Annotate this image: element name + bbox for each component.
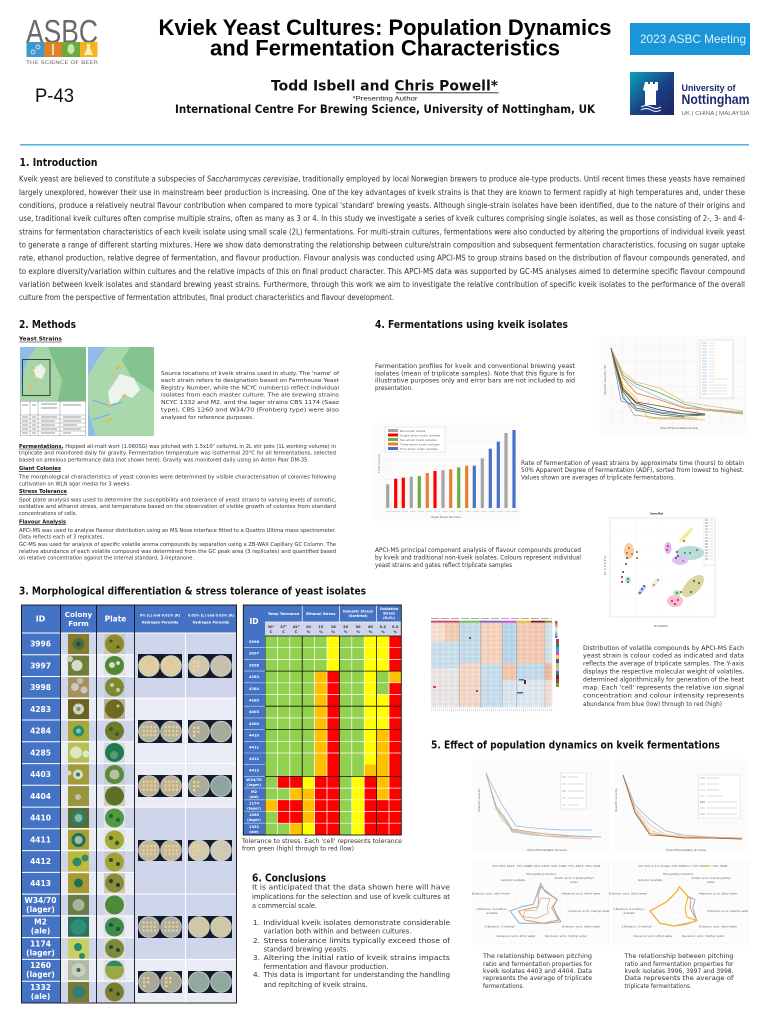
text block: left radar caption: ratio and fermentation properties for xyxy=(483,961,593,968)
text block: conclusions intro xyxy=(252,882,451,910)
column: strain IDs: (ale) xyxy=(31,927,50,936)
stress row labels: 3996 xyxy=(249,640,259,644)
column: strain IDs: 1260 xyxy=(30,961,51,970)
title: and Fermentation Characteristics xyxy=(210,36,560,60)
radar axis labels: 1-Butanol, 3-methyl- xyxy=(485,924,515,928)
plates: group W34/70 to 1174 xyxy=(138,916,232,938)
text block: right radar caption xyxy=(623,953,735,990)
radar axis labels: Decanoic acid, ethyl ester xyxy=(496,934,536,938)
column: strain IDs: 4411 xyxy=(30,835,51,844)
radar axis labels: Butanoic acid, ethyl ester xyxy=(472,892,511,896)
stress row labels: 4412 xyxy=(249,757,259,761)
table: colony morphology and hydrogen peroxide plates xyxy=(21,605,237,1003)
stress row labels: 3998 xyxy=(249,663,259,667)
radar axis labels: Acetic acid, 2-phenylethyl xyxy=(555,876,594,880)
scatter plot: PCA score plot: PC 1 (44.9%) xyxy=(654,624,668,628)
text block: right radar caption: kveik isolates 3996, 3997 and 3998. xyxy=(624,968,734,975)
list: conclusions: standard brewing yeasts. xyxy=(264,944,348,954)
plates: group 4403 and 4404 xyxy=(138,775,232,797)
table header xyxy=(36,610,235,628)
text block: right radar caption: ratio and fermentation properties for xyxy=(624,961,734,968)
radar axis labels: Octanoic acid, methyl ester xyxy=(568,909,610,913)
stress table headers: 42° xyxy=(293,625,300,629)
radar legend: 25% 4403, 75% 4404 xyxy=(499,864,532,868)
text block: bar chart caption xyxy=(521,460,744,482)
text block: map caption: Source locations of kveik strains used in study. The 'name' of xyxy=(161,371,339,377)
text block: flavour analysis: APCI-MS was used to analyse flavour distribution using an MS Nose interface fitted to a Quattro Ultima mass spectrometer. xyxy=(19,528,336,534)
text block: map caption: Registry Number, while the NCYC number(s) reflect individual xyxy=(161,385,339,391)
text block: heat map caption xyxy=(583,645,745,708)
authors xyxy=(175,78,596,116)
table header: Colony xyxy=(65,610,93,619)
authors: Todd Isbell and Chris Powell* xyxy=(271,78,498,94)
list: conclusions xyxy=(253,918,451,989)
logo: University of Nottingham: University of xyxy=(682,83,736,93)
stress table headers: Oxidative xyxy=(380,607,399,611)
radar axis labels: Hexanoic acid, ethyl ester xyxy=(698,892,738,896)
text block: heat map caption: reflects the average of triplicate samples. The Y-axis xyxy=(583,660,744,667)
logo: ASBC xyxy=(25,13,99,66)
line chart: 4403 and 4404 pitching ratio xyxy=(473,759,609,852)
text block: heat map caption: map. Each 'cell' represents the relative ion signal xyxy=(583,684,744,691)
stress row labels: 4410 xyxy=(249,734,259,738)
radar axis labels: ester xyxy=(570,880,579,884)
scatter plot: PCA score plot: Score Plot xyxy=(650,512,664,516)
stress row labels: 3997 xyxy=(249,652,259,656)
radar axis labels: Phenylethyl Alcohol xyxy=(526,872,556,876)
radar axis labels: Isobutyl acetate xyxy=(501,878,525,882)
stress table headers: C xyxy=(282,630,285,634)
line chart: 4403 and 4404 pitching ratio: Time of Fermentation (in hours) xyxy=(526,848,567,852)
stress table headers: C xyxy=(270,630,273,634)
column: strain IDs: 4285 xyxy=(30,748,51,757)
meeting badge xyxy=(630,23,750,55)
radar axis labels: Octanoic acid, ethyl ester xyxy=(699,924,738,928)
authors: International Centre For Brewing Science, University of Nottingham, UK xyxy=(175,102,596,116)
radar axis labels: 1-Butanol, 3-methyl-, xyxy=(613,907,645,911)
list: conclusions: 1. xyxy=(253,918,260,927)
caption: stress table: Tolerance to stress. Each 'cell' represents tolerance xyxy=(241,838,402,845)
text block: bar chart caption: 50% Apparent Degree of Fermentation (ADF), sorted from lowest to highest. xyxy=(521,467,744,474)
plates: group 4283 to 4285 xyxy=(138,720,232,743)
text block: heat map caption: yeast strain is colour coded as indicated and data xyxy=(583,652,744,659)
list: conclusions: Stress tolerance limits typically exceed those of xyxy=(264,936,451,945)
radar chart: 4403 and 4404 flavour xyxy=(472,862,610,944)
text block: conclusions intro: a commercial scale. xyxy=(252,901,317,910)
radar axis labels: ester xyxy=(707,880,716,884)
stress row labels: (ale) xyxy=(249,795,259,799)
stress table headers: 37° xyxy=(280,625,287,629)
radar axis labels: Acetic acid, 2-phenylethyl xyxy=(692,876,731,880)
text block: fermentation profiles caption: isolates (mean of triplicate samples). Note that this figure is for xyxy=(375,370,576,377)
text block: map caption xyxy=(161,371,339,421)
radar legend: 50% 4403, 50% 4404 xyxy=(534,864,567,868)
table header: 0% (L) and 0.01% (R) xyxy=(140,614,181,618)
map: kveik source locations xyxy=(20,347,154,436)
column: strain IDs: 4284 xyxy=(30,727,51,736)
text block: right radar caption: triplicate fermentations. xyxy=(624,983,692,990)
text block: introduction body: culture from the perspective of fermentation attributes, final product characteristics and flavour development. xyxy=(19,293,394,302)
stress row labels: (lager) xyxy=(247,806,261,810)
bar chart legend: Two-strain kveik isolates xyxy=(399,438,437,442)
stress row labels: 4403 xyxy=(249,710,259,714)
text block: map caption: analysed for reference purposes. xyxy=(161,415,254,421)
logo: University of Nottingham: UK | CHINA | MALAYSIA xyxy=(682,111,750,117)
column: colony form photos xyxy=(66,634,90,1002)
radar axis labels: 1-Butanol, 3-methyl- xyxy=(622,924,652,928)
stress table headers: 30 xyxy=(355,625,361,629)
heat map: volatile compounds xyxy=(431,618,559,710)
stress table headers: C xyxy=(295,630,298,634)
column: strain IDs: (lager) xyxy=(26,948,55,958)
radar axis labels: Decanoic acid, methyl ester xyxy=(682,934,725,938)
text block: flavour analysis: Flavour Analysis xyxy=(19,519,67,525)
column: strain IDs: (lager) xyxy=(26,905,55,914)
plates: group 4410 to 4413 xyxy=(138,840,232,861)
text block: stress tolerance xyxy=(19,489,336,517)
column: strain IDs: 4403 xyxy=(30,770,51,779)
list: conclusions: and repitching of kveik strains. xyxy=(264,980,368,989)
text block: flavour analysis: on relative concentration against the internal standard, 3-heptanone. xyxy=(19,556,194,562)
logo: University of Nottingham xyxy=(630,72,750,117)
stress table headers: % xyxy=(393,630,397,634)
stress table headers: % xyxy=(381,630,385,634)
text block: fermentations xyxy=(19,443,336,464)
stress row labels: 4285 xyxy=(249,698,259,702)
table header: Form xyxy=(68,619,89,628)
text block: PCA caption: APCI-MS principal component analysis of flavour compounds produced xyxy=(375,547,581,554)
list: conclusions: variation both within and between cultures. xyxy=(264,926,412,936)
stress table headers: % xyxy=(319,630,323,634)
stress table headers: % xyxy=(307,630,311,634)
column: strain IDs: (lager) xyxy=(26,970,55,979)
column: strain IDs: W34/70 xyxy=(25,896,56,905)
column: strain IDs: 3996 xyxy=(30,640,51,649)
logo: ASBC: THE SCIENCE OF BEER xyxy=(25,60,99,66)
radar axis labels: Octanoic acid, ethyl ester xyxy=(562,924,601,928)
text block: stress tolerance: concentrations of cells. xyxy=(19,511,77,517)
radar legend: 70% 3996 xyxy=(671,864,686,868)
stress table headers: % xyxy=(331,630,335,634)
heading: effect of population dynamics: 5. Effect of population dynamics on kveik fermentations xyxy=(431,740,720,752)
poster number: P-43 xyxy=(35,85,74,107)
column: strain IDs: 4413 xyxy=(30,879,51,888)
column: strain IDs: 4404 xyxy=(30,792,51,801)
text block: flavour analysis: GC-MS was used for analysis of specific volatile aroma compounds by separation using a ZB-WAX Capillary GC Column. The xyxy=(19,542,337,548)
stress table headers: % xyxy=(356,630,360,634)
heading: fermentations using kveik isolates: 4. Fermentations using kveik isolates xyxy=(375,319,568,331)
text block: PCA caption: yeast strains and gates reflect triplicate samples xyxy=(375,562,512,569)
text block: fermentations: based on previous performance data (not shown here). Gravity was monitored daily using an Anton Paar DM-35. xyxy=(19,458,309,464)
text block: flavour analysis xyxy=(19,519,337,562)
stress row labels: 1332 xyxy=(249,825,259,829)
text block: flavour analysis: Data reflects each of 3 replicates. xyxy=(19,535,104,541)
text block: flavour analysis: relative abundance of each volatile compound was determined from the GC peak area (3 replicates) and quantified based xyxy=(19,549,336,555)
radar axis labels: Butanoic acid, ethyl ester xyxy=(609,892,648,896)
heading: conclusions: 6. Conclusions xyxy=(252,872,326,884)
text block: giant colonies: The morphological characteristics of yeast colonies were determined by visible characterisation of colonies following xyxy=(18,475,336,481)
radar axis labels: Phenylethyl Alcohol xyxy=(663,872,693,876)
list: conclusions: Altering the initial ratio of kveik strains impacts xyxy=(264,953,450,962)
bar chart legend: Four-strain kveik isolates xyxy=(400,447,438,451)
text block: fermentation profiles caption xyxy=(375,363,576,392)
text block: stress tolerance: Stress Tolerance xyxy=(19,489,67,495)
text block: map caption: type), CBS 1260 and W34/70 (Frohberg type) were also xyxy=(161,407,339,413)
stress row labels: 4413 xyxy=(249,769,259,773)
line chart: 4403 and 4404 pitching ratio: Specific Gravity xyxy=(477,788,481,812)
radar legend: 75% 4403, 25% 4404 xyxy=(568,864,601,868)
column: strain IDs: 4283 xyxy=(30,705,51,714)
list: conclusions: This data is important for understanding the handling xyxy=(263,970,450,979)
stress cells xyxy=(265,605,401,835)
radar legend: 70% 3998 xyxy=(712,864,727,868)
plates: group 3996 to 3998 xyxy=(138,654,232,678)
stress table headers: 40 xyxy=(368,625,373,629)
radar axis labels: Decanoic acid, ethyl ester xyxy=(633,934,673,938)
text block: map caption: NCYC 1332 and M2, and the lager strains CBS 1174 (Saaz xyxy=(161,400,339,406)
table: stress tolerance heat table xyxy=(243,605,401,835)
radar axis labels: acetate xyxy=(623,911,635,915)
text block: heat map caption: displays the respective molecular weight of volatiles, xyxy=(583,668,744,675)
heading: introduction: 1. Introduction xyxy=(20,157,98,169)
stress table headers: 10 xyxy=(306,625,311,629)
stress row labels xyxy=(243,636,265,835)
stress table headers: 20 xyxy=(343,625,349,629)
text block: left radar caption: The relationship between pitching xyxy=(482,953,592,960)
title xyxy=(158,15,612,60)
table header: ID xyxy=(36,614,46,624)
bar chart legend: Three-strain kveik isolates xyxy=(399,442,440,446)
text block: giant colonies: Giant Colonies xyxy=(19,466,62,472)
radar legend xyxy=(638,864,727,868)
scatter plot: PCA score plot: PC 2 (19.4%) xyxy=(603,555,607,575)
radar axis labels: acetate xyxy=(486,911,498,915)
radar chart: 3996 to 3998 flavour xyxy=(609,862,749,944)
stress table headers: Temp Tolerance xyxy=(268,612,300,616)
stress row labels: (lager) xyxy=(247,783,261,787)
list: conclusions: fermentation and flavour production. xyxy=(264,962,388,971)
table header: 0.02% (L) and 0.03% (R) xyxy=(188,614,235,618)
stress table headers: 18 xyxy=(331,625,336,629)
text block: fermentation profiles caption: Fermentation profiles for kveik and conventional brewing yeast xyxy=(375,363,576,370)
bar chart legend: Single-strain kveik isolates xyxy=(400,434,441,438)
stress row labels: (ale) xyxy=(249,830,259,834)
column: strain IDs: M2 xyxy=(34,918,47,927)
stress table headers: ID xyxy=(249,617,259,626)
column: strain IDs: 4410 xyxy=(30,814,51,823)
stress table headers: (Sorbitol) xyxy=(348,614,368,618)
bar chart: time to 50% ADF: Time (hours) xyxy=(377,454,381,474)
text block: PCA caption: by kveik and traditional non-kveik isolates. Colours represent individual xyxy=(375,554,581,561)
stress row labels: 4283 xyxy=(249,675,259,679)
text block: heat map caption: Distribution of volatile compounds by APCI-MS Each xyxy=(583,645,744,652)
heading: methods: 2. Methods xyxy=(19,319,76,331)
stress row labels: 1174 xyxy=(249,802,259,806)
text block: fermentation profiles caption: illustrative purposes only and error bars are not included to aid xyxy=(375,378,575,385)
bar chart: time to 50% ADF xyxy=(373,423,520,521)
radar axis labels xyxy=(609,872,749,938)
line chart: fermentation profiles: Specific Gravity (°P) xyxy=(603,365,607,395)
text block: giant colonies: cultivation on WLN agar media for 3 weeks. xyxy=(19,481,131,487)
text block: conclusions intro: It is anticipated that the data shown here will have xyxy=(252,882,451,892)
stress table headers: 0.2 xyxy=(380,625,386,629)
list: conclusions: 4. xyxy=(253,970,260,979)
column: strain IDs: 1332 xyxy=(30,983,51,992)
text block: left radar caption: fermentations. xyxy=(483,983,524,990)
stress table headers: % xyxy=(369,630,373,634)
line chart: 3996 to 3998 pitching ratio xyxy=(613,759,748,852)
text block: left radar caption: kveik isolates 4403 and 4404. Data xyxy=(483,968,592,975)
scatter plot: PCA score plot xyxy=(603,512,715,628)
text block: fermentations: triplicate and monitored daily for gravity. Fermentation temperature was isothermal 20°C for all fermentations, selected xyxy=(19,451,336,457)
table header: Plate xyxy=(105,614,126,624)
text block: PCA caption xyxy=(375,547,581,569)
caption: stress table xyxy=(241,838,402,852)
stress row labels: 4411 xyxy=(249,745,259,749)
line chart: fermentation profiles: Time of Fermentation (hours) xyxy=(659,426,698,430)
stress row labels: M2 xyxy=(251,790,258,794)
stress table headers: 30° xyxy=(268,625,275,629)
text block: heat map caption: concentration and colour intensity represents xyxy=(583,692,744,699)
stress row labels: W34/70 xyxy=(246,778,262,782)
column: plate photos xyxy=(104,634,125,1002)
text block: right radar caption: The relationship between pitching xyxy=(623,953,734,960)
stress table headers: Ethanol Stress xyxy=(306,612,336,616)
radar axis labels: Isobutyl acetate xyxy=(638,878,662,882)
stress row labels: 1260 xyxy=(249,813,259,817)
radar legend: 70% 3997 xyxy=(692,864,707,868)
stress table headers: 15 xyxy=(318,625,324,629)
column: strain IDs: 3997 xyxy=(30,661,51,670)
table header: Hydrogen Peroxide xyxy=(142,620,179,624)
line chart: 3996 to 3998 pitching ratio: Time of Fermentation (in hours) xyxy=(665,848,706,852)
radar axis labels: 1-Butanol, 3-methyl-, xyxy=(476,907,508,911)
meeting badge: 2023 ASBC Meeting xyxy=(640,32,746,46)
bar chart: time to 50% ADF: Yeast Strain Number xyxy=(431,515,462,519)
heading: morphological differentiation: 3. Morphological differentiation & stress tolerance of yeast isolates xyxy=(19,586,366,598)
text block: fermentation profiles caption: presentation. xyxy=(375,385,413,392)
text block: stress tolerance: Spot plate analysis was used to determine the susceptibility and tolerance of yeast strains to varying levels of osmotic, xyxy=(19,497,336,503)
stress table headers: Stress xyxy=(383,612,395,616)
text block: heat map caption: abundance from blue (low) through to red (high) xyxy=(583,701,722,708)
text block: fermentations: Fermentations. Hopped all-malt wort (1.060SG) was pitched with 1.5x10⁷ cells/mL in 2L stir pots (1L working volume) in xyxy=(19,443,336,450)
stress row labels: 4404 xyxy=(249,722,259,726)
text block: bar chart caption: Values shown are averages of triplicate fermentations. xyxy=(521,474,675,482)
panel: methods xyxy=(18,319,339,562)
text block: left radar caption: represents the average of triplicate xyxy=(483,975,592,982)
text block: giant colonies xyxy=(18,466,336,487)
plates: group 1260 and 1332 xyxy=(138,971,232,993)
radar axis labels: Hexanoic acid, ethyl ester xyxy=(561,892,601,896)
stress table headers: Osmotic Stress xyxy=(343,610,373,614)
radar axis labels: Decanoic acid, methyl ester xyxy=(545,934,588,938)
list: conclusions: Individual kveik isolates demonstrate considerable xyxy=(264,918,451,927)
bar chart legend: Non-kveik Yeasts xyxy=(400,429,426,433)
text block: introduction body xyxy=(19,175,745,302)
column: strain IDs: 4412 xyxy=(30,857,51,866)
column: strain IDs: 1174 xyxy=(30,940,51,948)
text block: right radar caption: Data represents the average of xyxy=(624,975,735,982)
table header: Hydrogen Peroxide xyxy=(193,620,230,624)
panel: conclusions xyxy=(252,872,451,989)
stress row labels: (lager) xyxy=(247,818,261,822)
radar axis labels: Octanoic acid, methyl ester xyxy=(707,909,749,913)
column: strain IDs: 3998 xyxy=(30,683,51,692)
bar chart legend xyxy=(385,427,445,452)
subheading: yeast strains: Yeast Strains xyxy=(18,336,63,342)
authors: *Presenting Author xyxy=(352,96,419,102)
stress table headers: 0.3 xyxy=(392,625,399,629)
logo: University of Nottingham: Nottingham xyxy=(682,91,750,107)
column: strain IDs: (ale) xyxy=(31,992,50,1001)
panel: introduction xyxy=(19,157,745,302)
radar legend: 33% 3,3,3 (mix) xyxy=(644,864,668,868)
text block: map caption: isolates from each master culture. The ale brewing strains xyxy=(161,393,339,399)
column: strain IDs xyxy=(25,640,56,1001)
line chart: fermentation profiles xyxy=(599,336,747,434)
radar axis labels xyxy=(472,872,610,938)
line chart: 3996 to 3998 pitching ratio: Specific Gravity xyxy=(614,788,618,812)
logo: ASBC: ASBC xyxy=(26,13,98,50)
stress table headers: % xyxy=(344,630,348,634)
stress row labels: 4284 xyxy=(249,687,259,691)
table body backgrounds xyxy=(21,605,237,1003)
text block: conclusions intro: implications for the selection and use of kveik cultures at xyxy=(252,892,450,901)
list: conclusions: 3. xyxy=(253,953,260,962)
text block: map caption: each strain refers to designation based on Farmhouse Yeast xyxy=(161,378,339,384)
text block: left radar caption xyxy=(482,953,593,990)
text block: heat map caption: determined algorithmically for generation of the heat xyxy=(583,676,745,683)
text block: stress tolerance: oxidative and ethanol stress, and temperature based on the observation of visible growth of colonies from standard xyxy=(19,504,336,510)
radar legend xyxy=(492,864,601,868)
stress table headers xyxy=(243,605,401,636)
caption: stress table: from green (high) through to red (low) xyxy=(242,845,354,852)
stress table headers: (H₂O₂) xyxy=(383,616,395,620)
title: Kviek Yeast Cultures: Population Dynamics xyxy=(158,15,612,40)
list: conclusions: 2. xyxy=(253,936,260,945)
text block: bar chart caption: Rate of fermentation of yeast strains by approximate time (hours) to obtain xyxy=(521,460,744,467)
